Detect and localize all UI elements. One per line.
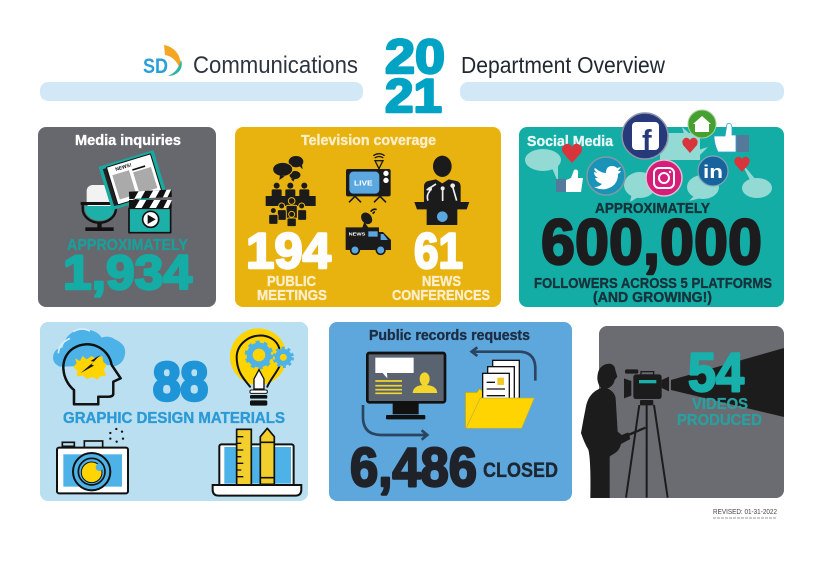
panel background bbox=[599, 326, 784, 498]
stat label: graphic design materials: GRAPHIC DESIGN MATERIALS bbox=[63, 410, 285, 427]
panel title: Public records requests bbox=[369, 327, 530, 344]
camera light beam bbox=[671, 348, 784, 417]
icon: computer monitor bbox=[367, 353, 445, 419]
heading: year 20: 20 bbox=[385, 31, 445, 84]
icon: thumbs up right bbox=[714, 124, 749, 152]
stat: 1,934: 1,934 bbox=[63, 247, 192, 300]
speech bubbles bbox=[525, 127, 772, 202]
icon: camera bbox=[57, 428, 128, 493]
stat label: followers: (AND GROWING!) bbox=[593, 290, 712, 306]
text: approximately: APPROXIMATELY bbox=[595, 200, 710, 217]
stat: 88: 88 bbox=[153, 352, 208, 412]
icon: light bulb with gears bbox=[230, 328, 293, 406]
panel title: Media inquiries bbox=[75, 132, 181, 149]
icon: Facebook bbox=[622, 113, 668, 159]
header bbox=[40, 31, 784, 122]
stat label: videos produced: PRODUCED bbox=[677, 412, 762, 429]
panel background bbox=[40, 322, 308, 501]
panel background bbox=[235, 127, 501, 307]
header bar left bbox=[40, 82, 363, 101]
logo: SD: SD bbox=[143, 55, 168, 78]
arrow: folder to monitor bbox=[472, 347, 535, 381]
panel: television coverage bbox=[235, 127, 501, 307]
stat: 194: 194 bbox=[246, 223, 331, 279]
icon text: NEWS!: NEWS! bbox=[115, 162, 133, 173]
icon: folder with documents bbox=[465, 360, 534, 428]
heading: Communications: Communications bbox=[193, 52, 358, 79]
panel: graphic design bbox=[40, 322, 308, 501]
stat label: videos produced: VIDEOS bbox=[692, 396, 748, 413]
panel title: Social Media bbox=[527, 133, 614, 150]
heading: Department Overview: Department Overview bbox=[461, 52, 665, 78]
panel background bbox=[519, 127, 784, 307]
stat label: followers bbox=[534, 276, 772, 306]
stat: 600,000: 600,000 bbox=[541, 206, 762, 278]
stat label: public meetings: PUBLIC bbox=[267, 273, 316, 290]
icon: laptop with ruler and pencil bbox=[213, 428, 301, 496]
icon: Instagram bbox=[646, 160, 682, 196]
icon: public meeting bbox=[266, 156, 316, 227]
stat label: videos produced bbox=[677, 396, 762, 429]
icon: hearts bbox=[562, 138, 750, 172]
heading: year 21: 21 bbox=[385, 69, 442, 122]
icon text: NEWS: NEWS bbox=[349, 232, 366, 238]
arrow: monitor to number bbox=[363, 405, 427, 440]
icon: head with cloud bbox=[53, 329, 125, 404]
icon: camera operator bbox=[581, 364, 669, 498]
panel: media inquiries bbox=[38, 127, 216, 307]
stat: 54: 54 bbox=[688, 341, 744, 403]
stat: 6,486: 6,486 bbox=[350, 436, 477, 498]
stat: 61: 61 bbox=[414, 223, 463, 279]
logo: SD bbox=[143, 45, 182, 78]
icon text: LIVE: LIVE bbox=[354, 178, 373, 187]
panel: public records bbox=[329, 322, 572, 501]
stat label: closed: CLOSED bbox=[483, 459, 558, 482]
icon: news conference podium bbox=[414, 156, 469, 225]
panel title: Television coverage bbox=[301, 132, 436, 149]
revision note: REVISED: 01-31-2022 bbox=[713, 507, 777, 516]
stat label: public meetings: MEETINGS bbox=[257, 287, 327, 304]
stat label: news conferences: CONFERENCES bbox=[392, 287, 490, 304]
stat label: public meetings bbox=[257, 273, 327, 304]
icon: news van bbox=[346, 209, 391, 254]
text: approximately: APPROXIMATELY bbox=[67, 237, 189, 254]
icon: LinkedIn bbox=[698, 156, 728, 186]
icon: thumbs up left bbox=[556, 170, 583, 192]
stat label: news conferences: NEWS bbox=[422, 273, 461, 290]
icon: live television bbox=[346, 154, 391, 202]
panel: videos bbox=[581, 326, 784, 498]
icon: LinkedIn: in bbox=[703, 162, 723, 182]
icon: Facebook: f bbox=[642, 125, 652, 157]
icon: microphone, newspaper, clapperboard bbox=[81, 150, 172, 233]
header bar right bbox=[460, 82, 784, 101]
icon: home bbox=[688, 110, 716, 138]
stat label: followers: FOLLOWERS ACROSS 5 PLATFORMS bbox=[534, 276, 772, 292]
panel: social media bbox=[519, 110, 784, 307]
icon: Twitter bbox=[587, 157, 625, 195]
panel background bbox=[329, 322, 572, 501]
stat label: news conferences bbox=[392, 273, 490, 304]
panel background bbox=[38, 127, 216, 307]
